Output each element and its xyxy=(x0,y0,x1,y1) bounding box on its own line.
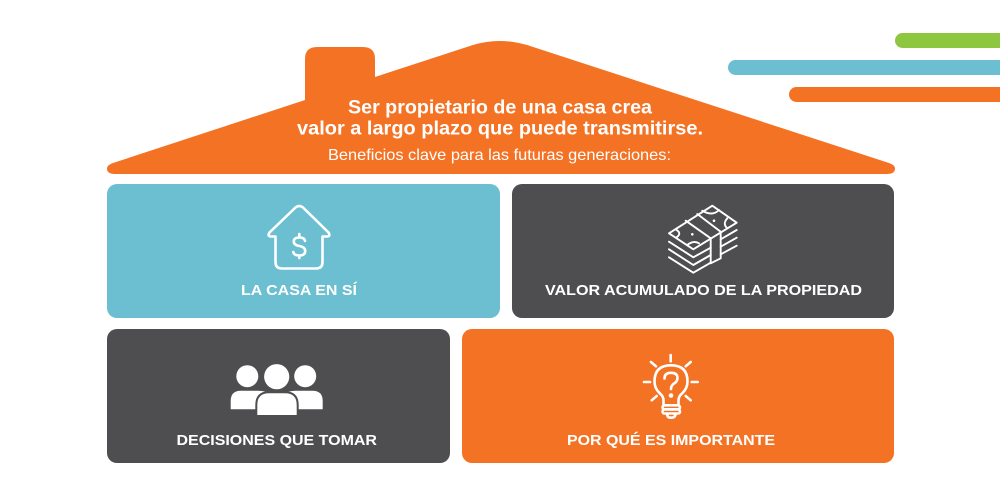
house roof banner xyxy=(107,41,895,174)
icon: light bulb with question mark xyxy=(644,355,698,418)
label: LA CASA EN SÍ xyxy=(241,282,358,299)
headline: Ser propietario de una casa crea xyxy=(348,96,652,118)
subheading: Beneficios clave para las futuras generaciones: xyxy=(328,147,671,164)
panel: decisiones que tomar xyxy=(107,329,450,463)
icon: house with dollar sign xyxy=(269,206,329,268)
label: DECISIONES QUE TOMAR xyxy=(176,432,377,449)
panel: por que es importante xyxy=(462,329,894,463)
roof shape xyxy=(107,41,895,174)
icon: stack of money xyxy=(669,206,737,273)
icon: three people xyxy=(231,364,323,415)
panel: la casa en si xyxy=(107,184,500,318)
headline xyxy=(297,96,703,140)
label: VALOR ACUMULADO DE LA PROPIEDAD xyxy=(545,282,862,299)
panel: valor acumulado de la propiedad xyxy=(512,184,894,318)
decorative bars xyxy=(728,33,1000,102)
label: POR QUÉ ES IMPORTANTE xyxy=(567,432,775,449)
headline: valor a largo plazo que puede transmitirse. xyxy=(297,118,703,140)
